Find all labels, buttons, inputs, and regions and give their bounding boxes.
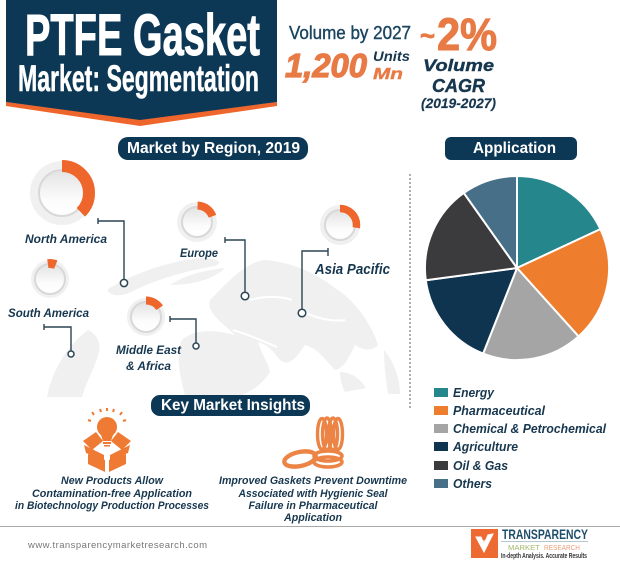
label: Middle East and Africa bbox=[116, 343, 182, 373]
donut: South America bbox=[31, 260, 69, 298]
heading: application: Application bbox=[473, 140, 556, 157]
heading: market by region: Market by Region, 2019 bbox=[127, 140, 300, 157]
title line 2: Market: Segmentation bbox=[18, 58, 259, 99]
CAGR stat: 2% bbox=[437, 9, 497, 60]
website url: www.transparencymarketresearch.com bbox=[27, 540, 207, 551]
label: Europe: Europe bbox=[180, 246, 218, 260]
icon: gasket rings bbox=[283, 418, 342, 469]
insight text: improved gaskets bbox=[219, 475, 407, 524]
insight text: improved gaskets: Failure in Pharmaceutical bbox=[248, 500, 378, 512]
CAGR stat: ~ bbox=[420, 20, 435, 51]
dotted divider bbox=[409, 174, 411, 408]
label: Asia Pacific: Asia Pacific bbox=[314, 261, 391, 278]
label: Middle East and Africa: Middle East bbox=[116, 343, 182, 357]
donut: Asia Pacific bbox=[320, 205, 360, 245]
insight text: new products bbox=[15, 475, 209, 512]
leader: South America bbox=[44, 324, 74, 357]
slice: Pharmaceutical bbox=[517, 229, 609, 336]
volume stat: Units bbox=[373, 49, 411, 64]
logo: Transparency Market Research: MARKET bbox=[508, 543, 540, 552]
legend: application: Others bbox=[453, 477, 492, 491]
legend: application: Energy bbox=[453, 386, 495, 400]
volume stat: 1,200 bbox=[285, 47, 368, 84]
donut: Europe bbox=[177, 202, 217, 242]
heading: key market insights: Key Market Insights bbox=[161, 397, 305, 414]
donut: Middle East and Africa bbox=[127, 298, 165, 336]
leader: North America bbox=[98, 218, 128, 287]
label: North America: North America bbox=[25, 232, 107, 246]
CAGR stat: CAGR bbox=[432, 75, 486, 96]
slice: Chemical and Petrochemical bbox=[483, 268, 579, 360]
insight text: improved gaskets: Application bbox=[283, 512, 342, 524]
title line 1: PTFE Gasket bbox=[25, 3, 260, 68]
legend: application: Agriculture bbox=[452, 440, 518, 454]
slice: Agriculture bbox=[426, 268, 517, 354]
heading: application bbox=[445, 137, 577, 160]
volume stat bbox=[285, 22, 411, 84]
insight text: new products: in Biotechnology Production Processes bbox=[15, 500, 209, 512]
label: South America: South America bbox=[8, 306, 89, 320]
volume stat: Volume by 2027 bbox=[289, 22, 411, 43]
map coast gaps bbox=[233, 297, 345, 347]
leader: Europe bbox=[225, 237, 249, 300]
slice: Energy bbox=[517, 176, 600, 268]
slice: Others bbox=[464, 176, 517, 268]
CAGR stat: Volume bbox=[423, 56, 494, 75]
logo: Transparency Market Research bbox=[471, 526, 588, 560]
insight text: improved gaskets: Associated with Hygienic Seal bbox=[238, 488, 388, 500]
footer rule bbox=[0, 526, 620, 528]
insight text: new products: Contamination-free Application bbox=[32, 488, 192, 500]
title banner bbox=[6, 0, 277, 126]
leader: Middle East and Africa bbox=[170, 316, 199, 349]
donut: North America bbox=[30, 161, 94, 225]
legend: application bbox=[434, 386, 607, 491]
legend: application: Pharmaceutical bbox=[453, 404, 546, 418]
CAGR stat bbox=[420, 9, 497, 111]
logo: Transparency Market Research: In-depth Analysis. Accurate Results bbox=[501, 553, 587, 560]
heading: market by region bbox=[118, 137, 308, 160]
icon: light bulb in box bbox=[83, 408, 131, 472]
CAGR stat: (2019-2027) bbox=[421, 95, 496, 111]
leader: Asia Pacific bbox=[298, 248, 328, 317]
logo: Transparency Market Research: RESEARCH bbox=[544, 543, 580, 552]
label: Middle East and Africa: & Africa bbox=[126, 359, 171, 373]
insight text: new products: New Products Allow bbox=[61, 475, 164, 487]
legend: application: Chemical & Petrochemical bbox=[453, 422, 607, 436]
pie chart: application bbox=[425, 176, 609, 360]
logo: Transparency Market Research: TRANSPARENCY bbox=[502, 526, 588, 542]
world map background bbox=[47, 258, 400, 397]
legend: application: Oil & Gas bbox=[453, 459, 508, 473]
insight text: improved gaskets: Improved Gaskets Prevent Downtime bbox=[219, 475, 407, 487]
slice: Oil and Gas bbox=[425, 193, 517, 280]
volume stat: Mn bbox=[373, 66, 403, 83]
